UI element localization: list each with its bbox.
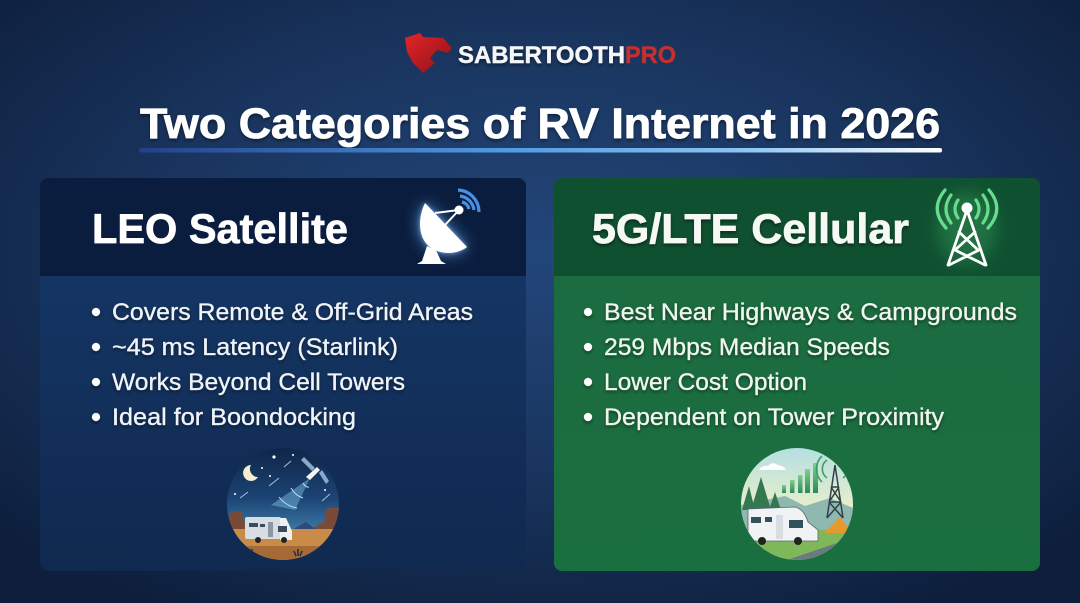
satellite: [301, 457, 329, 484]
desert ground: [233, 529, 333, 560]
road: [789, 543, 837, 560]
title: Two Categories of RV Internet in 2026: [140, 100, 940, 148]
logo wordmark accent: PRO: [625, 42, 676, 69]
panel: 5G/LTE cellular: [554, 178, 1040, 571]
RV: [245, 517, 292, 543]
stars: [234, 454, 326, 495]
bullet 2: 259 Mbps Median Speeds: [604, 334, 890, 361]
icon: cell tower: [937, 190, 997, 265]
moon: [243, 465, 258, 481]
panel header: [554, 178, 1040, 276]
bullet 3: Works Beyond Cell Towers: [112, 369, 405, 396]
illustration: RV under satellite at night: [227, 448, 339, 560]
RV: [748, 507, 818, 545]
cloud: [759, 463, 786, 470]
title underline: [139, 148, 942, 152]
logo wordmark: SABERTOOTH: [458, 42, 625, 69]
panel body: [40, 178, 526, 571]
tower: [816, 456, 854, 518]
bullet 1: Covers Remote & Off-Grid Areas: [112, 299, 473, 326]
mesas: [227, 508, 339, 540]
heading: LEO Satellite: [92, 205, 348, 252]
trees: [742, 477, 781, 510]
signal beam: [271, 478, 310, 510]
bullet list: [584, 299, 1017, 431]
shrubs: [248, 549, 302, 556]
bullet 3: Lower Cost Option: [604, 369, 807, 396]
logo: [405, 33, 676, 73]
heading: 5G/LTE Cellular: [592, 205, 909, 252]
panel: LEO satellite: [40, 178, 526, 571]
tent: [824, 517, 848, 533]
bullet 4: Dependent on Tower Proximity: [604, 404, 944, 431]
icon: sabertooth head: [405, 33, 452, 73]
bullet 2: ~45 ms Latency (Starlink): [112, 334, 398, 361]
bullet 4: Ideal for Boondocking: [112, 404, 356, 431]
hills: [741, 496, 853, 535]
icon: satellite dish: [417, 190, 479, 264]
panel body: [554, 178, 1040, 571]
grass: [748, 530, 846, 560]
panel header: [40, 178, 526, 276]
bullet list: [92, 299, 473, 431]
signal bars: [782, 463, 818, 493]
bullet 1: Best Near Highways & Campgrounds: [604, 299, 1017, 326]
illustration: RV near tower and campground: [741, 448, 854, 560]
